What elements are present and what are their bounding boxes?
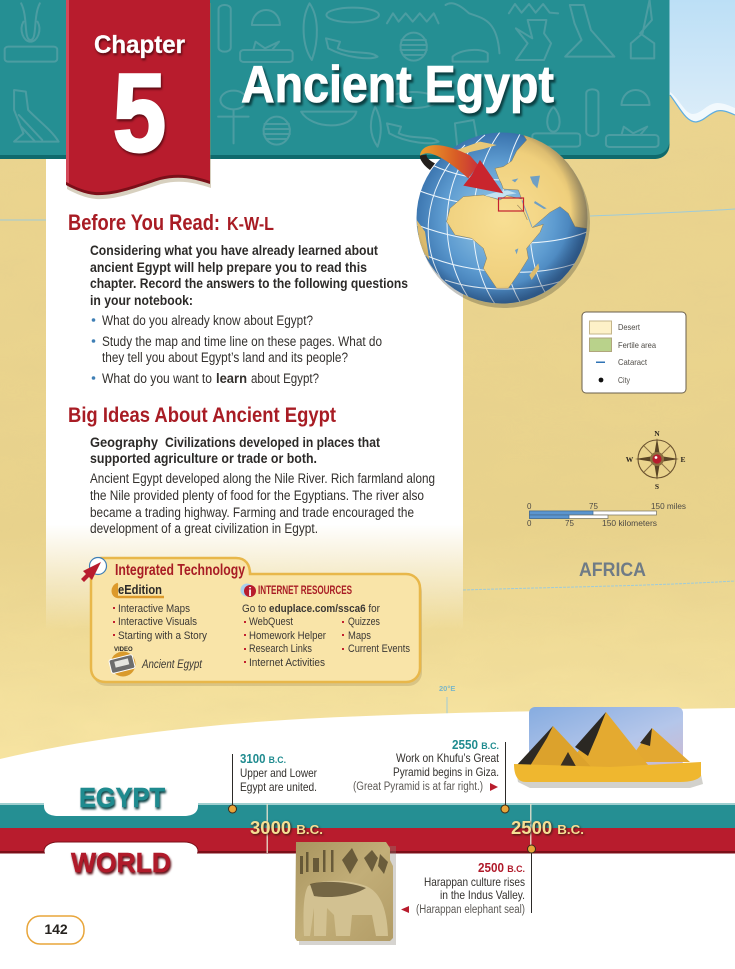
icon: compass rose: N — [654, 429, 660, 438]
internet resources list: Quizzes — [348, 616, 380, 628]
text block: ancient egypt summary: Ancient Egypt developed along the Nile River. Rich farmland along — [90, 471, 435, 486]
icon: internet info — [240, 584, 256, 599]
event: 2500 B.C.: in the Indus Valley. — [440, 888, 525, 902]
icon: internet info: i — [248, 585, 252, 599]
bulleted questions: Study the map and time line on these pages. What do — [102, 334, 382, 349]
icon: locator globe — [416, 132, 590, 308]
text block: ancient egypt summary: development of a great civilization in Egypt. — [90, 521, 318, 536]
land: Greenland — [457, 142, 497, 154]
heading: Before You Read: Before You Read: — [68, 210, 220, 235]
bulleted questions — [92, 313, 382, 386]
page number — [27, 916, 84, 944]
bulleted questions: What do you already know about Egypt? — [102, 313, 313, 328]
event: 2550 B.C.: (Great Pyramid is at far right.) — [353, 781, 483, 793]
graticule — [417, 132, 587, 304]
header band with hieroglyphs — [0, 0, 670, 159]
text block: before you read introduction: ancient Egypt will help prepare you to read this — [90, 260, 367, 275]
internet resources list: Homework Helper — [249, 630, 326, 642]
internet resources list: WebQuest — [249, 616, 293, 628]
bulleted questions: about Egypt? — [251, 371, 319, 386]
title: Ancient Egypt — [241, 56, 554, 114]
event: 2500 B.C.: Harappan culture rises — [424, 875, 525, 889]
timeline background: white curve — [0, 708, 735, 969]
text block: before you read introduction: chapter. Record the answers to the following questions — [90, 276, 408, 291]
map scale bar: 0 — [527, 519, 532, 528]
text block: geography big idea — [90, 435, 380, 466]
hieroglyph pattern — [5, 0, 658, 147]
bulleted questions: they tell you about Egypt’s land and its people? — [102, 350, 348, 365]
map: latitude and longitude lines — [0, 209, 735, 722]
event: 3100 B.C. — [228, 752, 317, 813]
icon: arrow and circle — [81, 558, 106, 582]
map scale bar: 75 — [589, 502, 598, 511]
event: 2550 B.C.: 2550 B.C. — [452, 738, 499, 752]
event: 3100 B.C.: Upper and Lower — [240, 766, 317, 780]
icon: pointer left — [401, 906, 409, 913]
Red Sea and Nile — [522, 200, 532, 227]
internet resources list: Internet Activities — [249, 657, 325, 669]
icon: compass rose — [626, 429, 686, 491]
eEdition list: Interactive Visuals — [118, 616, 197, 628]
internet resources intro: Go to eduplace.com/ssca6 for — [242, 603, 380, 615]
text block: before you read introduction: Considering what you have already learned about — [90, 243, 378, 258]
locator rectangle — [498, 198, 524, 211]
icon: compass rose: E — [680, 455, 686, 464]
chapter number: 5 — [113, 52, 166, 175]
label tab: World — [44, 842, 198, 878]
icon: pointer right — [490, 783, 498, 791]
event: 2550 B.C.: Work on Khufu’s Great — [396, 751, 500, 765]
map scale bar: 150 miles — [651, 502, 686, 511]
internet resources list — [244, 616, 410, 669]
panel: integrated technology — [81, 558, 422, 686]
legend: desert: Desert — [618, 322, 641, 332]
event: 2550 B.C. — [353, 738, 509, 813]
label tab: Egypt: EGYPT — [79, 782, 165, 813]
text block: geography big idea: Civilizations developed in places that — [165, 435, 380, 450]
icon: compass rose: W — [626, 455, 634, 464]
internet resources list: Current Events — [348, 643, 410, 655]
internet resources list: Research Links — [249, 643, 312, 655]
eEdition list: Interactive Maps — [118, 603, 190, 615]
eEdition list: Starting with a Story — [118, 630, 207, 642]
event: 3100 B.C.: 3100 B.C. — [240, 752, 286, 766]
land: Africa and Eurasia — [446, 135, 588, 289]
page number: 142 — [44, 921, 68, 937]
eEdition list — [113, 603, 207, 642]
map label: 20°E: 20°E — [439, 684, 455, 693]
heading: Big Ideas: Big Ideas About Ancient Egypt — [68, 403, 336, 427]
timeline date: 3000 B.C.: 3000 B.C. — [250, 818, 323, 838]
map scale bar — [527, 502, 686, 528]
map: sea and coast at top right — [660, 0, 735, 122]
map scale bar: 150 kilometers — [602, 519, 657, 528]
bulleted questions: What do you want to — [102, 371, 212, 386]
legend: city: City — [618, 375, 631, 385]
label tab: World: WORLD — [71, 847, 171, 878]
map scale bar: 0 — [527, 502, 532, 511]
timeline date: 2500 B.C.: 2500 B.C. — [511, 818, 584, 838]
icon: video cassette: VIDEO — [114, 647, 133, 653]
timeline bands — [0, 803, 735, 854]
label tab: Egypt — [44, 782, 198, 816]
video title: Ancient Egypt — [141, 659, 203, 671]
chapter ribbon — [66, 0, 211, 199]
heading: K-W-L: K-W-L — [227, 214, 274, 234]
map legend — [582, 312, 686, 393]
internet resources heading: INTERNET RESOURCES — [258, 585, 352, 597]
event: 2500 B.C.: 2500 B.C. — [478, 861, 525, 875]
legend: cataract: Cataract — [618, 357, 648, 367]
text block: ancient egypt summary — [90, 471, 435, 536]
panel heading: Integrated Technology — [115, 562, 245, 579]
eEdition logo: eEdition — [118, 583, 162, 597]
bulleted questions: learn — [216, 371, 247, 386]
text block: ancient egypt summary: became a trading highway. Farming and trade encouraged the — [90, 505, 414, 520]
icon: compass rose: S — [655, 482, 659, 491]
icon: video cassette — [109, 647, 136, 676]
chapter label: Chapter — [94, 31, 185, 59]
land: South America edge and Madagascar — [417, 220, 539, 280]
event: 2500 B.C. — [401, 845, 536, 916]
arrow — [420, 145, 503, 193]
text block: geography big idea: Geography — [90, 435, 158, 450]
text block: before you read introduction: in your notebook: — [90, 293, 193, 308]
text block: ancient egypt summary: the Nile provided plenty of food for the Egyptians. The river also — [90, 488, 424, 503]
photo: pyramids of Giza — [514, 707, 703, 788]
internet resources list: Maps — [348, 630, 371, 642]
panel: white reading column — [46, 150, 463, 630]
text block: geography big idea: supported agriculture or trade or both. — [90, 451, 317, 466]
event: 3100 B.C.: Egypt are united. — [240, 780, 317, 794]
legend: fertile area: Fertile area — [618, 340, 656, 350]
inland seas — [512, 176, 547, 254]
text block: before you read introduction — [90, 243, 408, 308]
map scale bar: 75 — [565, 519, 574, 528]
event: 2550 B.C.: Pyramid begins in Giza. — [393, 765, 499, 779]
map label: Africa: AFRICA — [579, 560, 646, 581]
event: 2500 B.C.: (Harappan elephant seal) — [416, 904, 525, 916]
photo: Harappan elephant seal — [295, 842, 396, 945]
Mediterranean shallows — [485, 190, 517, 199]
